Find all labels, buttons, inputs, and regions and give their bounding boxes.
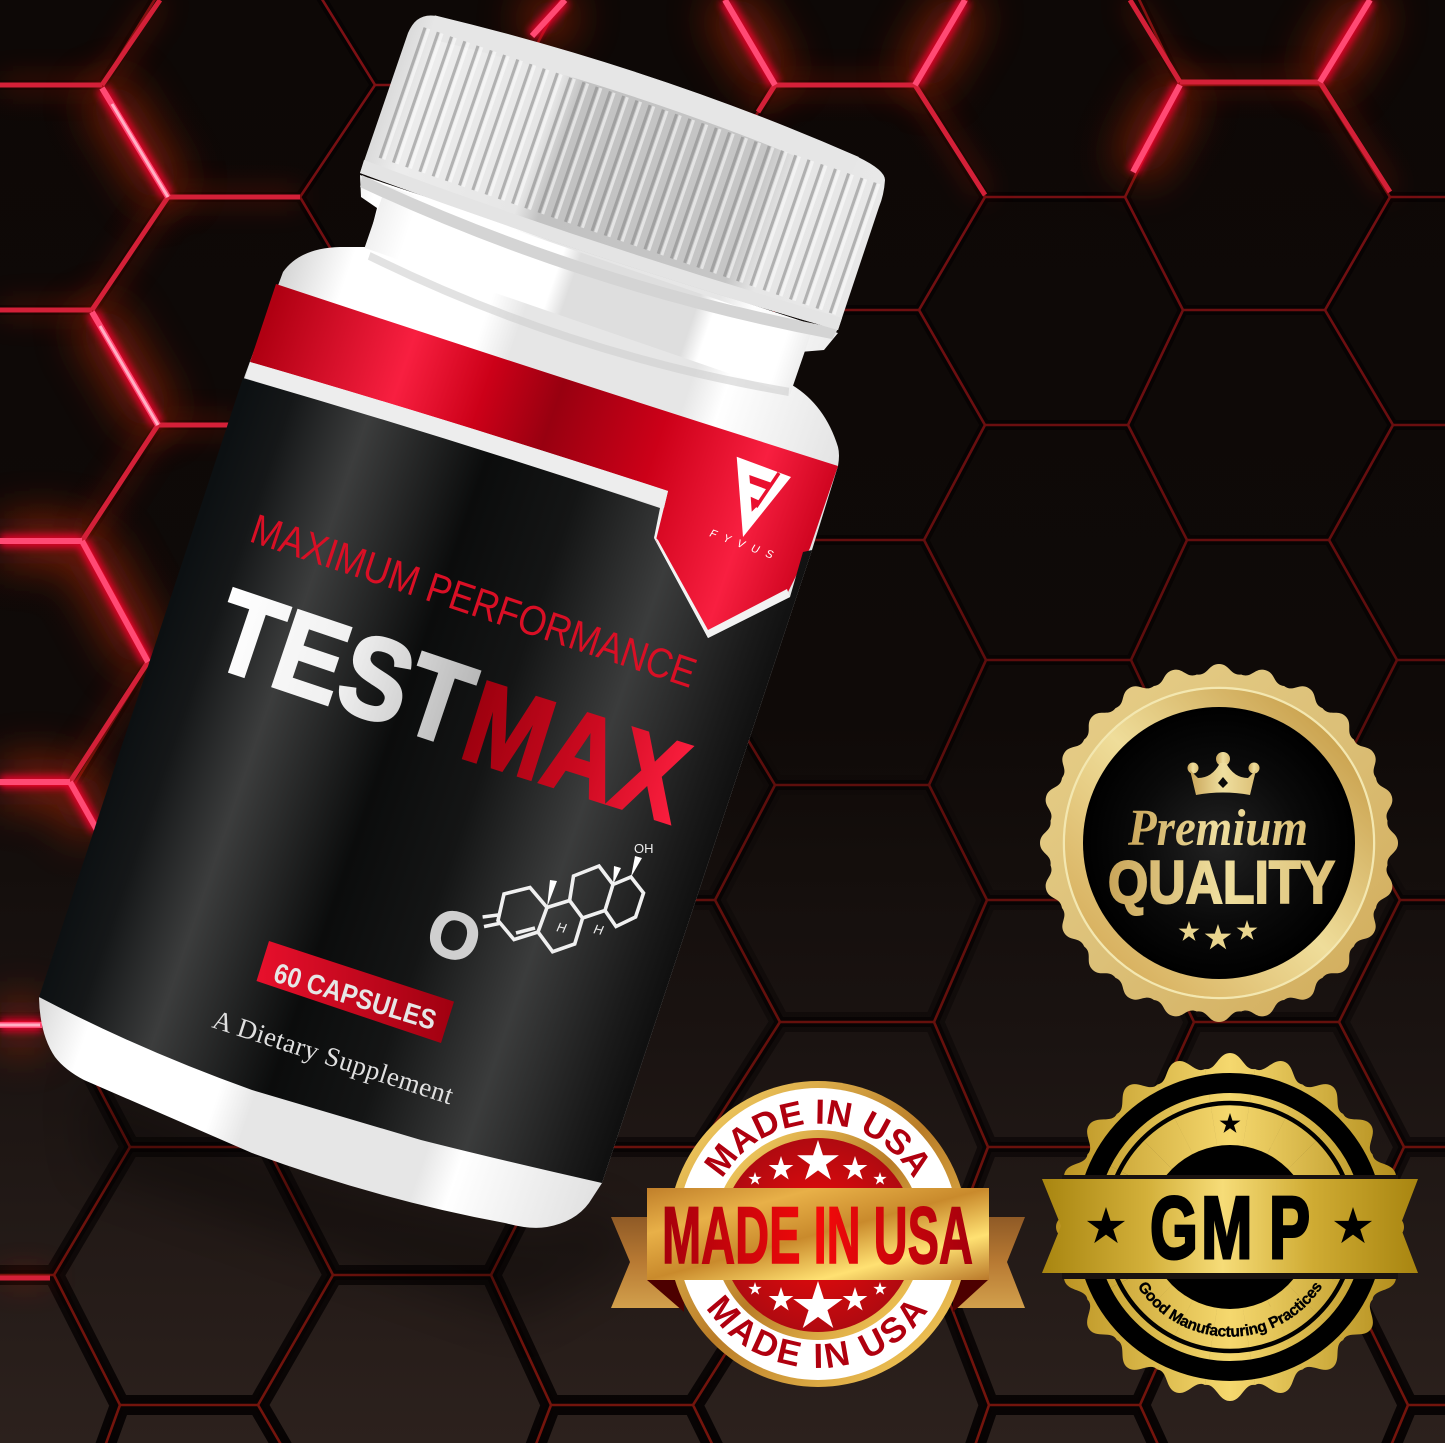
bottle shadow — [84, 1080, 640, 1320]
badge: gmp — [1042, 1053, 1418, 1401]
gmp ribbon — [1042, 1179, 1418, 1273]
molecule diagram: H — [592, 921, 605, 938]
shield white border — [654, 536, 790, 638]
product name: MAX — [449, 656, 702, 848]
arc text: MADE IN USA — [704, 1100, 928, 1178]
icon: crown — [1188, 752, 1260, 795]
arc text — [704, 1100, 928, 1368]
fyvus logo: FYVUS — [708, 528, 782, 564]
ribbon front — [647, 1188, 989, 1280]
bottle cap — [360, 16, 885, 330]
bottle neck — [333, 166, 838, 423]
molecule diagram: H — [555, 919, 568, 936]
product name: TEST — [199, 564, 489, 771]
bottle body — [39, 175, 839, 1228]
arc text: MADE IN USA — [707, 1294, 928, 1368]
molecule diagram — [418, 841, 654, 978]
arc guide paths — [702, 1124, 1322, 1368]
fyvus logo — [708, 457, 791, 564]
badge: made in usa: MADE IN USA — [662, 1191, 973, 1281]
badge: premium quality: QUALITY — [1108, 849, 1335, 916]
product name — [199, 564, 702, 848]
supplement line: A Dietary Supplement — [209, 1004, 458, 1110]
capsule count tag: 60 CAPSULES — [270, 957, 440, 1036]
gmp ribbon gap — [1062, 1175, 1398, 1279]
molecule diagram: OH — [634, 841, 654, 856]
stars — [748, 1140, 887, 1328]
gmp arc text: Good Manufacturing Practices — [1139, 1282, 1322, 1337]
badge: premium quality — [1037, 661, 1401, 1025]
molecule diagram: O — [418, 892, 490, 978]
black label — [39, 378, 812, 1183]
tagline: MAXIMUM PERFORMANCE — [245, 505, 702, 697]
ribbon tails — [611, 1217, 1025, 1312]
badge: gmp: GMP — [1150, 1179, 1310, 1278]
badge: made in usa — [611, 1081, 1025, 1387]
white stripe — [245, 362, 668, 508]
product bottle — [39, 16, 885, 1228]
red band and shield — [250, 284, 838, 634]
badge: premium quality: Premium — [1127, 800, 1308, 857]
